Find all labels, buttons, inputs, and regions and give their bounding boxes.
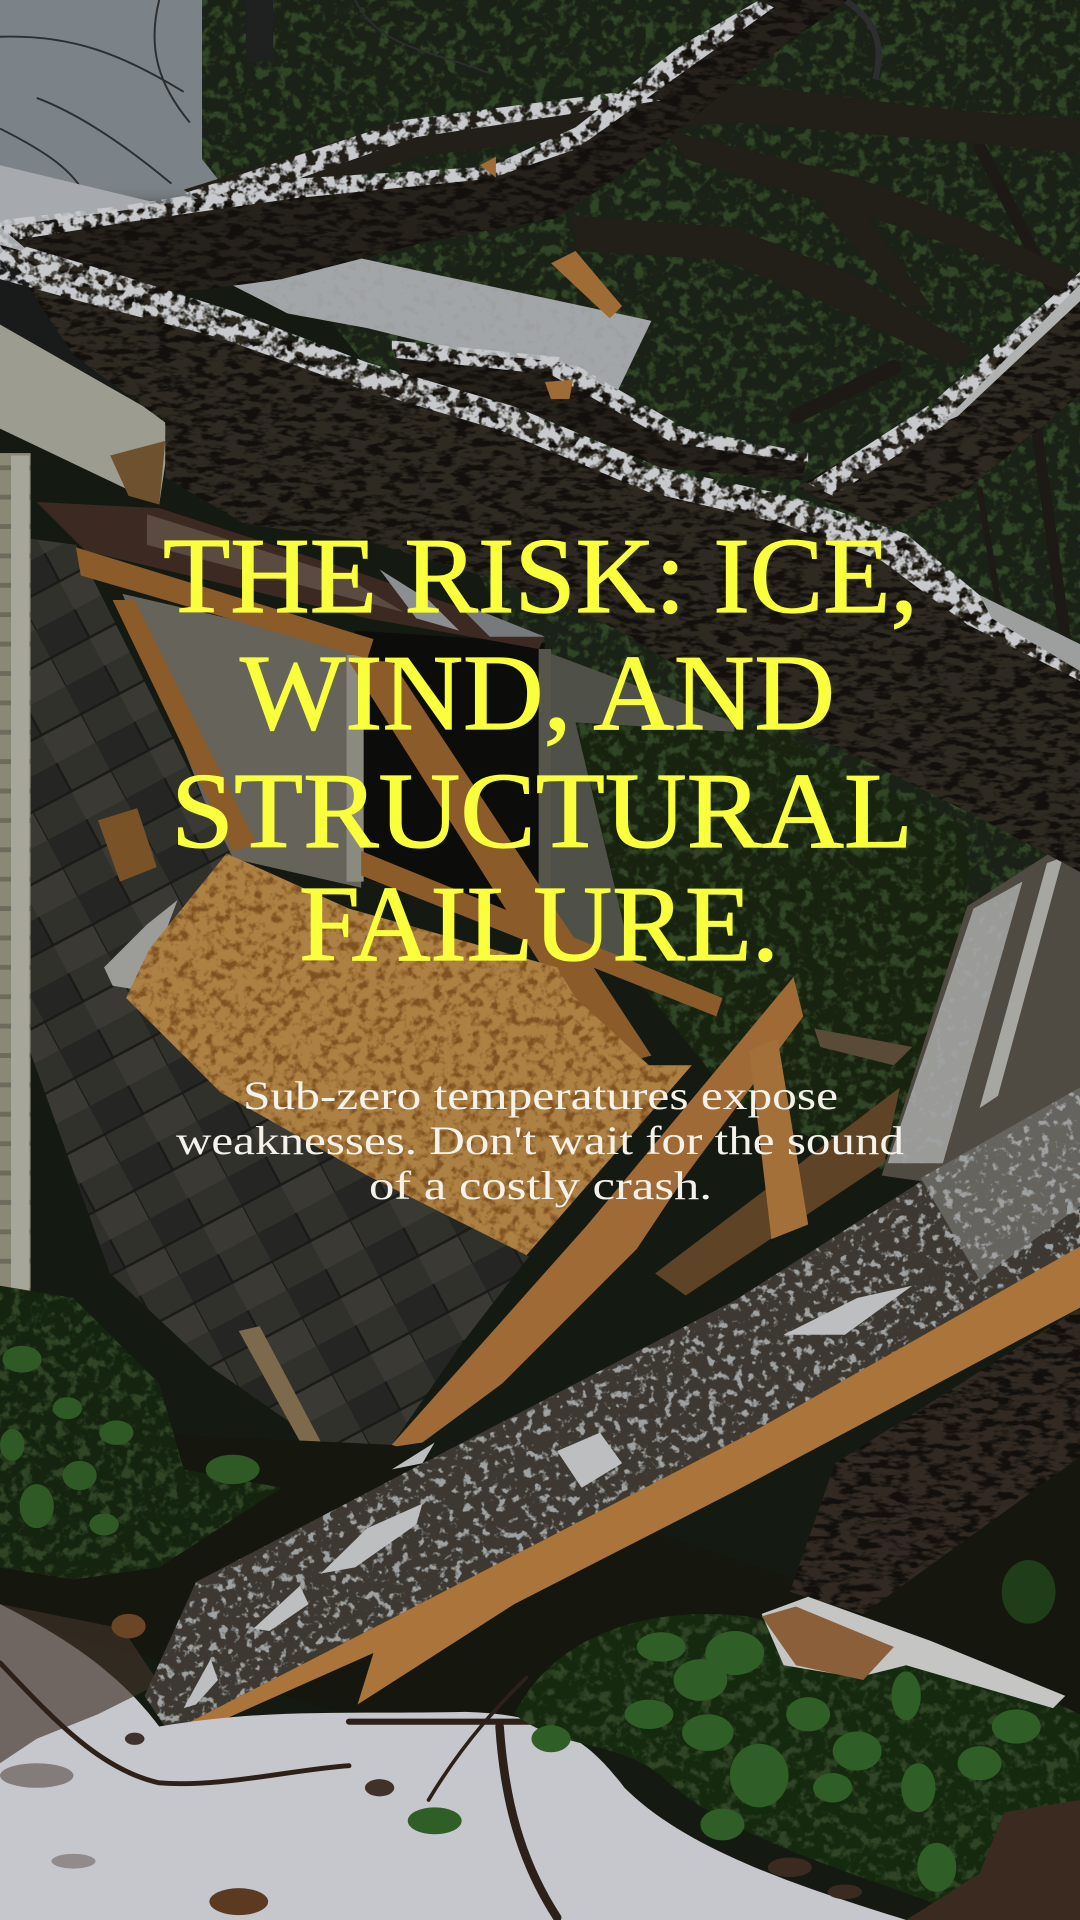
upper main limb — [0, 0, 847, 294]
canopy leaves — [202, 0, 1080, 906]
house wall — [122, 594, 967, 1176]
shingled roof — [31, 539, 529, 1463]
large shingle plank with snow — [144, 1087, 1080, 1733]
right side leafy bush — [514, 1614, 1080, 1920]
large fallen trunk — [0, 245, 1080, 872]
snow covered ground — [0, 1604, 906, 1920]
raised plank edge — [921, 1087, 1080, 1280]
title: WIND, AND — [240, 634, 835, 753]
OSB sheathing — [126, 853, 692, 1255]
side branches — [184, 83, 1080, 367]
thin branch with snow over upper roof — [392, 345, 808, 480]
torn white sheet — [104, 900, 178, 989]
gutter rubble and red underlayment under trunk — [37, 502, 545, 649]
left bush — [0, 1286, 282, 1580]
title: THE RISK: ICE, — [163, 517, 918, 636]
exposed wood edge of plank — [169, 1247, 1080, 1733]
large bright leaves — [408, 1560, 1056, 1892]
distant branches — [796, 147, 1080, 637]
snowy wood scrap at lower right — [762, 1597, 1065, 1708]
subtitle: of a costly crash. — [369, 1163, 712, 1208]
bare twigs at top left — [0, 0, 879, 196]
snow patches on plank — [184, 1286, 912, 1708]
dark underside of right panel — [790, 1308, 1080, 1614]
brown leaf litter at lower right — [768, 1800, 1080, 1920]
subtitle: weaknesses. Don't wait for the sound — [176, 1118, 904, 1163]
splintered wood on limbs — [480, 157, 622, 399]
snow on trunk and limbs — [0, 0, 1080, 681]
title: STRUCTURAL — [171, 752, 913, 871]
dark leaf litter on snow — [0, 1604, 394, 1915]
upper snowy roof section — [230, 257, 651, 389]
loose wood fragment on roof — [98, 808, 157, 882]
left fascia and eave — [0, 165, 190, 1423]
broken wooden planks — [135, 977, 912, 1533]
fallen twigs on snow — [0, 1663, 661, 1918]
sky — [0, 0, 245, 208]
subtitle: Sub-zero temperatures expose — [243, 1073, 838, 1118]
right branch — [796, 276, 1080, 529]
far right debris panel with snow — [882, 851, 1080, 1182]
rafters — [76, 547, 722, 1068]
title: FAILURE. — [299, 865, 779, 984]
dark ground under debris — [0, 1427, 1080, 1739]
